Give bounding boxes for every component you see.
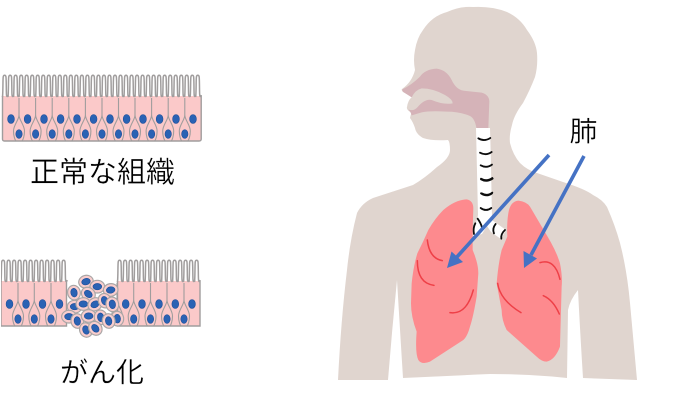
arrow: to left lung xyxy=(447,155,549,268)
cell layer: left xyxy=(1,260,67,326)
trachea xyxy=(473,128,506,239)
nasal and oral airway xyxy=(402,69,489,129)
label: cancerous change: がん化 xyxy=(60,357,144,388)
panel: cancerous tissue xyxy=(1,260,200,339)
body silhouette xyxy=(338,7,637,380)
arrow: to right lung xyxy=(524,156,584,268)
tumour cell cluster xyxy=(62,274,124,339)
panel: human body xyxy=(338,7,637,380)
label: lung: 肺 xyxy=(569,116,598,147)
panel: normal tissue xyxy=(2,75,201,141)
left lung xyxy=(411,199,478,363)
label: normal tissue: 正常な組織 xyxy=(30,156,175,189)
right lung xyxy=(497,201,562,362)
cell layer: right xyxy=(112,260,200,326)
cell layer: normal xyxy=(2,75,201,141)
